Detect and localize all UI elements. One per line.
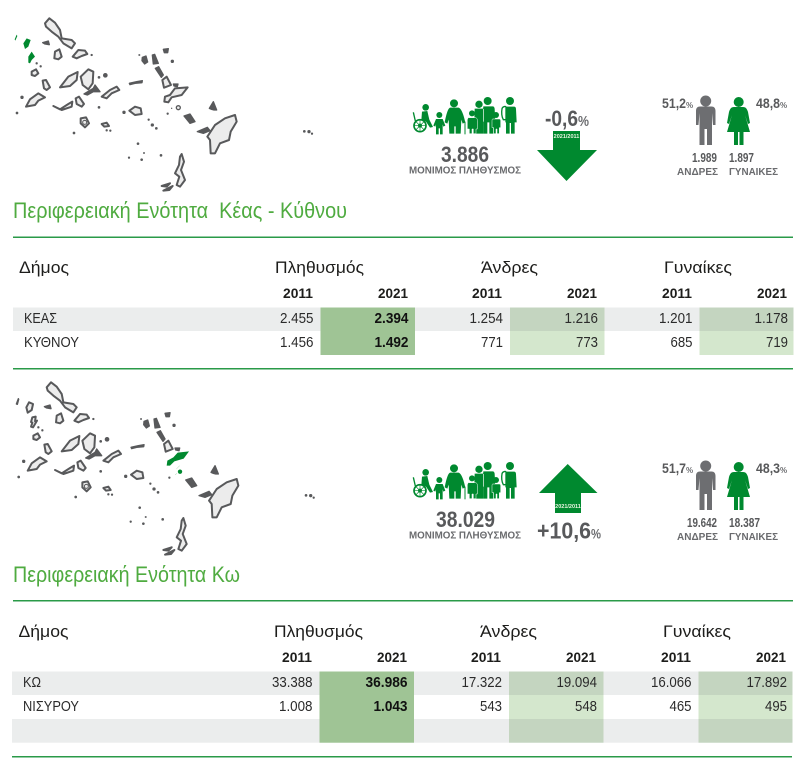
total population — [409, 142, 521, 176]
row: ΚΥΘΝΟΥ: ΚΥΘΝΟΥ — [24, 335, 79, 351]
row: ΚΩ: ΚΩ — [23, 675, 41, 691]
year header — [283, 286, 787, 301]
highlighted islands: Kos and Nisyros — [167, 451, 189, 475]
row: ΚΥΘΝΟΥ: 1.492 — [374, 335, 408, 351]
total population: ΜΟΝΙΜΟΣ ΠΛΗΘΥΣΜΟΣ — [409, 530, 521, 542]
gender split: men: % — [686, 466, 693, 475]
gender split: women: 18.387 — [729, 515, 760, 530]
gender split: men: 19.642 — [687, 515, 717, 530]
gender split: men: ΑΝΔΡΕΣ — [677, 166, 718, 178]
table header — [19, 258, 732, 277]
total population: 38.029 — [436, 507, 495, 532]
total population: 3.886 — [441, 142, 489, 167]
icon: family group — [413, 97, 517, 134]
row: ΝΙΣΥΡΟΥ — [23, 699, 787, 715]
arrow: up — [539, 464, 598, 513]
row: ΚΕΑΣ: ΚΕΑΣ — [24, 311, 57, 327]
row: ΚΥΘΝΟΥ — [24, 335, 788, 351]
row: ΚΥΘΝΟΥ: 685 — [670, 335, 692, 351]
gender split: men: 51,2 — [662, 96, 686, 111]
table header: Άνδρες — [481, 258, 538, 277]
year header: 2011 — [282, 650, 312, 665]
year header — [282, 650, 786, 665]
change percentage: -0,6 — [545, 106, 578, 131]
gender split: women: % — [780, 466, 787, 475]
gender split: women: 48,3 — [756, 461, 780, 476]
gender split: women: ΓΥΝΑΙΚΕΣ — [729, 166, 778, 178]
table header: Άνδρες — [480, 622, 537, 641]
table: Κέας - Κύθνου — [13, 258, 794, 355]
row: ΚΥΘΝΟΥ: 1.456 — [280, 335, 314, 351]
row: ΝΙΣΥΡΟΥ: ΝΙΣΥΡΟΥ — [23, 699, 79, 715]
gender split: women — [727, 461, 787, 543]
year header: 2021 — [378, 286, 408, 301]
row: ΝΙΣΥΡΟΥ: 495 — [765, 699, 787, 715]
row: ΚΩ: 17.892 — [746, 675, 787, 691]
table header: Δήμος — [18, 622, 68, 641]
row: ΚΕΑΣ: 1.178 — [754, 311, 788, 327]
Kea and Kythnos in neutral — [16, 399, 37, 427]
row: ΝΙΣΥΡΟΥ: 465 — [670, 699, 692, 715]
row: ΚΥΘΝΟΥ: 771 — [481, 335, 503, 351]
map: Κω highlighted — [16, 382, 314, 555]
title: section 2: Περιφερειακή Ενότητα Κω — [13, 562, 240, 587]
row: ΚΩ — [23, 675, 787, 691]
table header: Πληθυσμός — [275, 258, 364, 277]
year header: 2021 — [377, 650, 407, 665]
gender split: women: 48,8 — [756, 96, 780, 111]
arrow: down — [537, 131, 597, 181]
row: ΝΙΣΥΡΟΥ: 1.043 — [374, 699, 408, 715]
row: ΚΕΑΣ: 2.394 — [374, 311, 408, 327]
gender split: men: ΑΝΔΡΕΣ — [677, 531, 718, 543]
table header: Γυναίκες — [664, 258, 732, 277]
row: ΚΩ: 17.322 — [462, 675, 502, 691]
year header: 2011 — [661, 650, 691, 665]
year header: 2021 — [757, 286, 787, 301]
map: Κέας - Κύθνου highlighted — [15, 18, 313, 191]
table header: Γυναίκες — [663, 622, 731, 641]
table header: Δήμος — [19, 258, 69, 277]
gender split: women — [727, 96, 787, 178]
row: ΝΙΣΥΡΟΥ: 548 — [575, 699, 597, 715]
total population — [409, 507, 521, 542]
row: ΚΕΑΣ: 1.201 — [659, 311, 692, 327]
highlighted islands: Kea and Kythnos — [15, 35, 35, 63]
row: ΝΙΣΥΡΟΥ: 543 — [480, 699, 502, 715]
row: ΚΩ: 36.986 — [366, 675, 408, 691]
map detail: Kos, Nisyros in neutral — [164, 87, 188, 110]
year header: 2021 — [566, 650, 596, 665]
gender split: women: 1.897 — [729, 150, 754, 165]
total population: ΜΟΝΙΜΟΣ ΠΛΗΘΥΣΜΟΣ — [409, 164, 521, 176]
change percentage: % — [578, 113, 589, 130]
year header: 2011 — [471, 650, 501, 665]
row: ΚΩ: 19.094 — [556, 675, 597, 691]
table header — [18, 622, 731, 641]
icon: family group — [413, 462, 517, 499]
gender split: men: % — [686, 101, 693, 110]
title: section 1: Περιφερειακή Ενότητα Κέας - Κύθνου — [13, 198, 347, 223]
row: ΚΕΑΣ: 1.254 — [470, 311, 503, 327]
row: ΚΕΑΣ: 2.455 — [280, 311, 314, 327]
gender split: men: 1.989 — [692, 150, 717, 165]
row: ΝΙΣΥΡΟΥ: 1.008 — [279, 699, 312, 715]
year header: 2021 — [567, 286, 597, 301]
row: ΚΩ: 16.066 — [651, 675, 692, 691]
row: ΚΥΘΝΟΥ: 773 — [576, 335, 598, 351]
year header: 2021 — [756, 650, 786, 665]
gender split: women: ΓΥΝΑΙΚΕΣ — [729, 531, 778, 543]
table: Κω — [12, 622, 792, 743]
year header: 2011 — [662, 286, 692, 301]
row: ΚΕΑΣ: 1.216 — [564, 311, 598, 327]
year header: 2011 — [472, 286, 502, 301]
arrow: down: 2021/2011 — [554, 134, 579, 140]
year header: 2011 — [283, 286, 313, 301]
gender split: men — [662, 460, 718, 543]
gender split: men: 51,7 — [662, 461, 686, 476]
table header: Πληθυσμός — [274, 622, 363, 641]
row: ΚΕΑΣ — [24, 311, 788, 327]
change percentage: +10,6 — [537, 518, 591, 544]
gender split: men — [662, 96, 718, 178]
gender split: women: % — [780, 101, 787, 110]
arrow: up: 2021/2011 — [555, 504, 581, 510]
row: ΚΩ: 33.388 — [272, 675, 312, 691]
row: ΚΥΘΝΟΥ: 719 — [766, 335, 788, 351]
change percentage: % — [591, 526, 601, 542]
